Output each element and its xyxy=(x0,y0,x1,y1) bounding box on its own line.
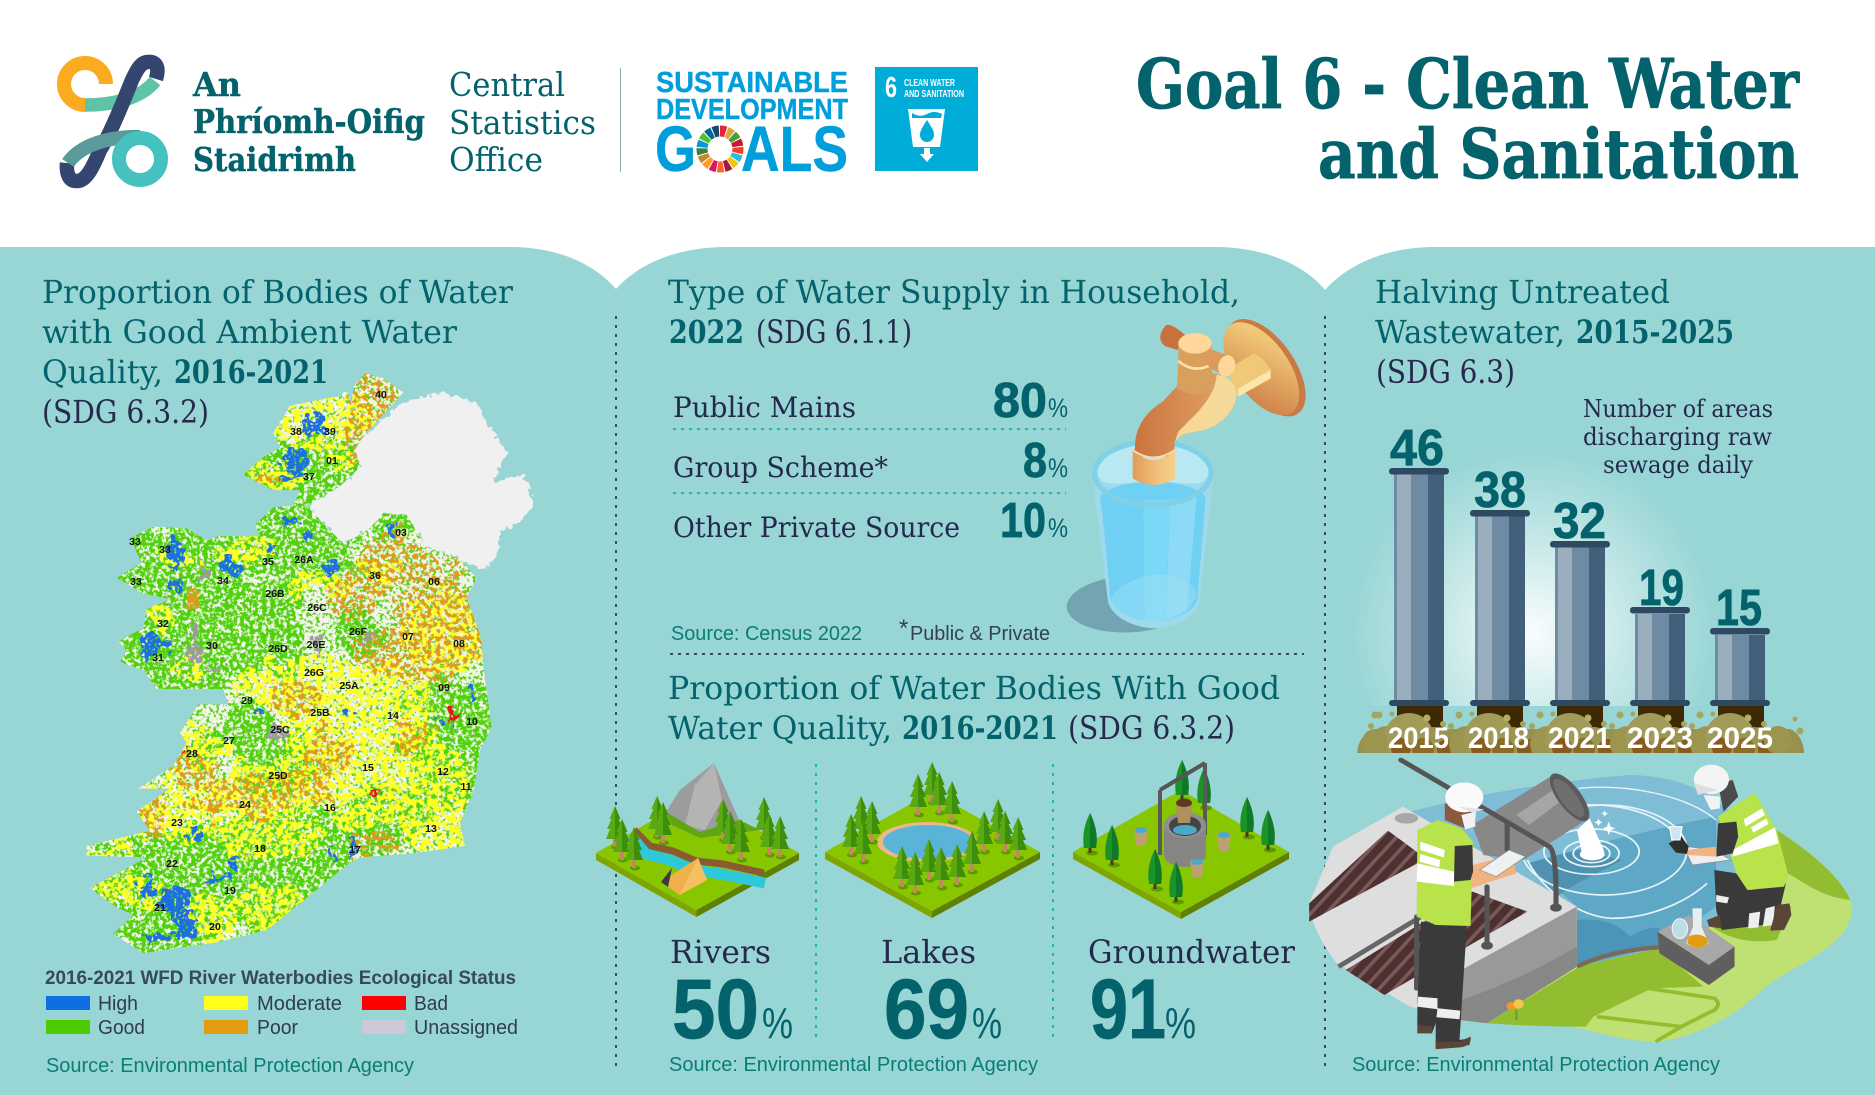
map: catchment labels: 39 xyxy=(324,426,336,438)
map: catchment labels: 15 xyxy=(362,762,374,774)
values: 46 xyxy=(1390,419,1444,476)
map: catchment labels xyxy=(129,389,478,933)
row: group scheme: % xyxy=(1048,453,1068,483)
heading: water supply: Type of Water Supply in Household, xyxy=(668,273,1240,311)
bar 2023 xyxy=(1630,607,1690,706)
footnote: public and private: Public & Private xyxy=(910,623,1050,645)
map: catchment labels: 19 xyxy=(224,885,236,897)
heading: water body quality xyxy=(668,669,1280,747)
heading: water body quality: Proportion of Water Bodies With Good xyxy=(668,669,1280,707)
map: catchment labels: 32 xyxy=(157,618,169,630)
trees xyxy=(606,796,789,870)
source: census: Source: Census 2022 xyxy=(671,623,862,645)
stat: groundwater: % xyxy=(1165,999,1196,1048)
flower xyxy=(1506,999,1524,1020)
map: catchment labels: 37 xyxy=(303,471,315,483)
source: left panel: Source: Environmental Protection Agency xyxy=(46,1055,414,1077)
sludge xyxy=(1357,712,1804,753)
stat: rivers xyxy=(670,933,793,1056)
stat: lakes: Lakes xyxy=(881,933,976,971)
map: catchment labels: 09 xyxy=(438,682,450,694)
heading: water body quality: Water Quality, xyxy=(668,709,892,747)
map: catchment labels: 27 xyxy=(223,735,235,747)
tap xyxy=(1133,306,1321,485)
icon: CSO knot mark xyxy=(64,62,161,181)
logo: Sustainable Development Goals: DEVELOPMENT xyxy=(656,94,848,126)
water xyxy=(1410,775,1740,967)
tent xyxy=(661,858,707,895)
row: other private source: 10 xyxy=(1000,494,1046,548)
sewage stubs xyxy=(1397,706,1764,730)
ground xyxy=(1487,830,1852,1042)
concrete platform xyxy=(1309,807,1577,1023)
bar 2015 xyxy=(1389,468,1449,706)
map: catchment labels: 28 xyxy=(186,748,198,760)
map: catchment labels: 23 xyxy=(171,817,183,829)
map: catchment labels: 36 xyxy=(369,570,381,582)
bar 2021 xyxy=(1550,541,1610,706)
text: Irish name: Phríomh-Oifig xyxy=(193,102,425,141)
railing xyxy=(1401,760,1559,988)
text: English name: Office xyxy=(449,140,543,179)
map: catchment labels: 26C xyxy=(307,602,327,614)
panel: teal background xyxy=(0,247,1875,1095)
chart note xyxy=(1583,395,1773,479)
legend: WFD ecological status: Unassigned xyxy=(414,1017,518,1039)
years: 2015 xyxy=(1388,722,1449,755)
toolbox xyxy=(1658,908,1735,985)
source: right panel: Source: Environmental Protection Agency xyxy=(1352,1054,1720,1076)
row: public mains xyxy=(673,374,1068,428)
map: catchment labels: 26F xyxy=(349,626,368,638)
map: catchment labels: 22 xyxy=(166,858,178,870)
heading: ambient water quality: 2016-2021 xyxy=(174,353,328,391)
values: 38 xyxy=(1474,461,1526,518)
values: 19 xyxy=(1639,559,1684,616)
stat: rivers: 50 xyxy=(672,962,759,1056)
icon: SDG 6 tile: 6 xyxy=(885,72,897,104)
row: other private source: Other Private Source xyxy=(673,511,960,544)
glass xyxy=(1092,442,1214,628)
title: and Sanitation xyxy=(1318,115,1799,195)
stat: lakes xyxy=(881,933,1002,1056)
heading: wastewater xyxy=(1375,273,1734,391)
legend: WFD ecological status: Bad xyxy=(414,993,448,1015)
map: catchment labels: 40 xyxy=(375,389,387,401)
stat: groundwater xyxy=(1088,933,1296,1056)
years: 2018 xyxy=(1468,722,1529,755)
map: catchment labels: 20 xyxy=(209,921,221,933)
illustration: rivers tile xyxy=(596,763,799,917)
row: group scheme xyxy=(673,434,1068,488)
front trees xyxy=(1148,849,1184,904)
worker right xyxy=(1669,765,1791,931)
bar 2025 xyxy=(1710,628,1770,706)
heading: ambient water quality xyxy=(42,273,514,431)
buckets xyxy=(1134,827,1231,877)
heading: ambient water quality: Quality, xyxy=(42,353,163,391)
map: catchment labels: 13 xyxy=(425,823,437,835)
legend: WFD ecological status: 2016-2021 WFD River Waterbodies Ecological Status xyxy=(45,968,516,989)
values: 32 xyxy=(1553,492,1606,549)
heading: water body quality: 2016-2021 xyxy=(902,709,1058,747)
text: English name xyxy=(449,65,596,179)
legend: WFD ecological status: Poor xyxy=(257,1017,298,1039)
years xyxy=(1388,722,1773,755)
row: other private source: % xyxy=(1048,513,1068,543)
back trees xyxy=(1083,760,1276,868)
text: English name: Central xyxy=(449,65,565,104)
map: Ireland river waterbodies xyxy=(86,373,534,954)
bar chart: areas discharging raw sewage xyxy=(1340,419,1804,763)
map: catchment labels: 01 xyxy=(326,455,338,467)
legend: WFD ecological status: High xyxy=(98,993,138,1015)
map: catchment labels: 26E xyxy=(307,639,325,651)
map: catchment labels: 24 xyxy=(239,799,251,811)
icon: SDG colour wheel xyxy=(695,124,745,174)
heading: water supply: (SDG 6.1.1) xyxy=(756,313,912,351)
heading: water supply: 2022 xyxy=(669,313,744,351)
heading: water body quality: (SDG 6.3.2) xyxy=(1068,709,1235,747)
map: catchment labels: 33 xyxy=(159,544,171,556)
row: public mains: % xyxy=(1048,393,1068,423)
row: group scheme: Group Scheme* xyxy=(673,451,888,484)
map: catchment labels: 26A xyxy=(294,554,314,566)
stat: rivers: % xyxy=(762,999,793,1048)
heading: ambient water quality: with Good Ambient Water xyxy=(42,313,458,351)
worker left xyxy=(1417,782,1526,1049)
years: 2023 xyxy=(1627,722,1693,755)
table: water supply shares xyxy=(673,374,1068,548)
source: middle panel: Source: Environmental Protection Agency xyxy=(669,1054,1038,1076)
map: catchment labels: 06 xyxy=(428,576,440,588)
map: Northern Ireland xyxy=(310,393,535,570)
map: catchment labels: 31 xyxy=(152,652,164,664)
icon: SDG 6 tile: AND SANITATION xyxy=(904,89,964,100)
heading: wastewater: (SDG 6.3) xyxy=(1376,353,1515,391)
map: catchment labels: 08 xyxy=(453,638,465,650)
stat: rivers: Rivers xyxy=(670,933,771,971)
illustration: lakes tile xyxy=(825,762,1040,918)
text: English name: Statistics xyxy=(449,103,596,142)
footnote: public and private xyxy=(899,615,1050,645)
stat: lakes: % xyxy=(972,999,1002,1048)
map: catchment labels: 14 xyxy=(387,710,399,722)
stat: groundwater: 91 xyxy=(1090,962,1166,1056)
title xyxy=(1136,45,1800,195)
map: catchment labels: 34 xyxy=(217,575,229,587)
stat: groundwater: Groundwater xyxy=(1088,933,1296,971)
glass shadow xyxy=(1065,572,1195,636)
map: catchment labels: 25A xyxy=(339,680,359,692)
icon: SDG 6 tile: CLEAN WATER xyxy=(904,78,956,89)
values: 15 xyxy=(1716,579,1762,636)
map: catchment labels: 21 xyxy=(154,902,166,914)
map: catchment labels: 17 xyxy=(349,844,361,856)
illustration: workers testing water at outfall xyxy=(1309,760,1852,1049)
heading: water supply xyxy=(668,273,1240,351)
chart note: discharging raw xyxy=(1583,423,1772,451)
map: catchment labels: 26D xyxy=(268,643,288,655)
years: 2025 xyxy=(1707,722,1773,755)
heading: wastewater: 2015-2025 xyxy=(1576,313,1734,351)
heading: wastewater: Wastewater, xyxy=(1375,313,1565,351)
legend: WFD ecological status: Good xyxy=(98,1017,145,1039)
logo: Central Statistics Office xyxy=(64,62,596,181)
map: catchment labels: 30 xyxy=(206,640,218,652)
illustration: tap filling a glass xyxy=(1065,306,1321,636)
map: catchment labels: 33 xyxy=(129,536,141,548)
map: catchment labels: 38 xyxy=(290,426,302,438)
map: catchment labels: 25D xyxy=(268,770,288,782)
map: catchment labels: 33 xyxy=(130,576,142,588)
values xyxy=(1390,419,1762,636)
mountain xyxy=(666,763,760,838)
legend: WFD ecological status: Moderate xyxy=(257,993,342,1015)
well xyxy=(1160,763,1206,867)
text: Irish name: Staidrimh xyxy=(193,140,356,179)
footnote: public and private: * xyxy=(899,615,908,642)
chart note: sewage daily xyxy=(1603,451,1753,479)
row: other private source xyxy=(673,494,1068,548)
logo: Sustainable Development Goals: ALS xyxy=(741,113,848,185)
map: catchment labels: 26B xyxy=(265,588,285,600)
map: Republic of Ireland status colours xyxy=(86,373,492,954)
river xyxy=(634,830,764,873)
heading: ambient water quality: (SDG 6.3.2) xyxy=(42,393,209,431)
text: Irish name: An xyxy=(192,65,241,104)
text: Irish name xyxy=(192,65,425,179)
map: catchment labels: 18 xyxy=(254,843,266,855)
map: catchment labels: 03 xyxy=(395,527,407,539)
map: catchment labels: 25B xyxy=(310,707,330,719)
map: catchment labels: 07 xyxy=(402,631,414,643)
logo: Sustainable Development Goals: G xyxy=(655,113,696,185)
map: catchment labels: 25C xyxy=(270,724,290,736)
outfall pipe xyxy=(1472,768,1596,860)
icon: SDG 6 tile xyxy=(875,67,978,171)
map: catchment labels: 29 xyxy=(241,695,253,707)
map: catchment labels: 26G xyxy=(304,667,324,679)
heading: ambient water quality: Proportion of Bodies of Water xyxy=(42,273,514,311)
trees xyxy=(842,762,1027,896)
map: catchment labels: 16 xyxy=(324,802,336,814)
legend: WFD ecological status xyxy=(45,968,518,1039)
heading: wastewater: Halving Untreated xyxy=(1375,273,1670,311)
bar 2018 xyxy=(1470,510,1530,706)
row: public mains: Public Mains xyxy=(673,391,856,424)
map: catchment labels: 11 xyxy=(460,781,472,793)
map: catchment labels: 10 xyxy=(466,716,478,728)
logo: Sustainable Development Goals: SUSTAINABLE xyxy=(656,67,848,99)
logo: Sustainable Development Goals xyxy=(655,67,848,185)
years: 2021 xyxy=(1548,722,1611,755)
lake xyxy=(877,822,977,862)
map: catchment labels: 12 xyxy=(437,766,449,778)
outflow xyxy=(1577,811,1615,860)
illustration: groundwater tile xyxy=(1073,760,1289,919)
chart note: Number of areas xyxy=(1583,395,1773,423)
stat: lakes: 69 xyxy=(884,962,969,1056)
row: group scheme: 8 xyxy=(1023,434,1047,488)
map: catchment labels: 35 xyxy=(262,556,274,568)
row: public mains: 80 xyxy=(993,374,1047,428)
